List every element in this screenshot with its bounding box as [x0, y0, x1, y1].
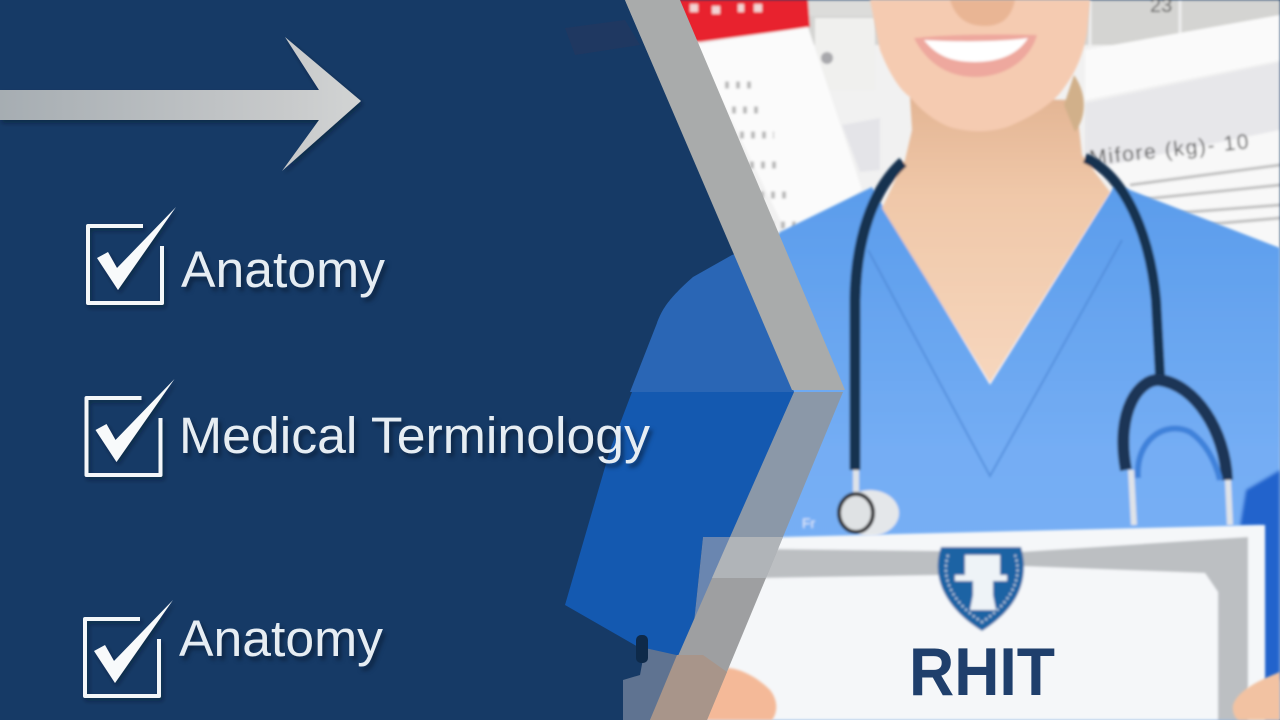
nose shadow: [950, 0, 1015, 26]
item: Medical Terminology: [86, 379, 651, 475]
sleeve upper: [630, 254, 794, 392]
RHIT label: RHIT: [909, 634, 1055, 710]
chest piece: [839, 490, 899, 536]
nurse: [640, 0, 1280, 720]
scrubs: [640, 180, 1280, 720]
item: Anatomy repeated: [85, 600, 384, 696]
calendar grid: [808, 0, 1280, 100]
hair: [1064, 75, 1084, 132]
faint red reflection: [565, 20, 640, 55]
checkbox icon: [86, 379, 174, 475]
left white chart: [695, 27, 862, 240]
arrow: [0, 37, 361, 171]
smile: [914, 34, 1037, 77]
lighter band over certificate edge: [712, 537, 783, 578]
blue inner loop: [1138, 429, 1220, 480]
navy panel: [0, 0, 794, 720]
hand right: [1233, 672, 1280, 720]
lighter strip: [694, 537, 730, 619]
chevron lower band lower part: [650, 537, 783, 720]
checkbox icon: [88, 207, 176, 303]
hand left: [700, 667, 776, 720]
hand tint in band: [650, 655, 727, 720]
chevron lower band upper part: [730, 392, 843, 537]
item: Anatomy: [88, 207, 386, 303]
stethoscope tube right: [1085, 158, 1160, 375]
collar lines: [868, 240, 1122, 476]
sleeve lower: [565, 392, 800, 660]
stethoscope loop: [1123, 380, 1227, 480]
certificate: [700, 525, 1265, 720]
certificate border: [762, 537, 1248, 720]
red header: [672, 0, 810, 42]
logo shield: [938, 547, 1024, 631]
silver tubes: [856, 470, 1230, 525]
arm through panel: [623, 648, 677, 720]
stethoscope tube left: [855, 162, 903, 470]
chevron upper band: [625, 0, 845, 390]
neck and chest: [882, 97, 1110, 382]
shaded sleeve right: [1240, 470, 1280, 680]
background: medical charts: [620, 0, 1280, 720]
cuff: [636, 635, 648, 663]
certificate sheet: [700, 525, 1265, 720]
checkbox icon: [85, 600, 173, 696]
right data sheet: Mifore (kg)- 10: [1088, 130, 1250, 170]
label: Anatomy: [181, 241, 386, 298]
label: Anatomy: [179, 610, 384, 667]
gray chevron: [625, 0, 845, 720]
face: [870, 0, 1090, 131]
small pocket mark: Fr: [802, 515, 816, 531]
label: Medical Terminology: [179, 407, 651, 464]
sleeve seen through panel: [565, 20, 800, 720]
right data sheet: [842, 62, 1280, 250]
